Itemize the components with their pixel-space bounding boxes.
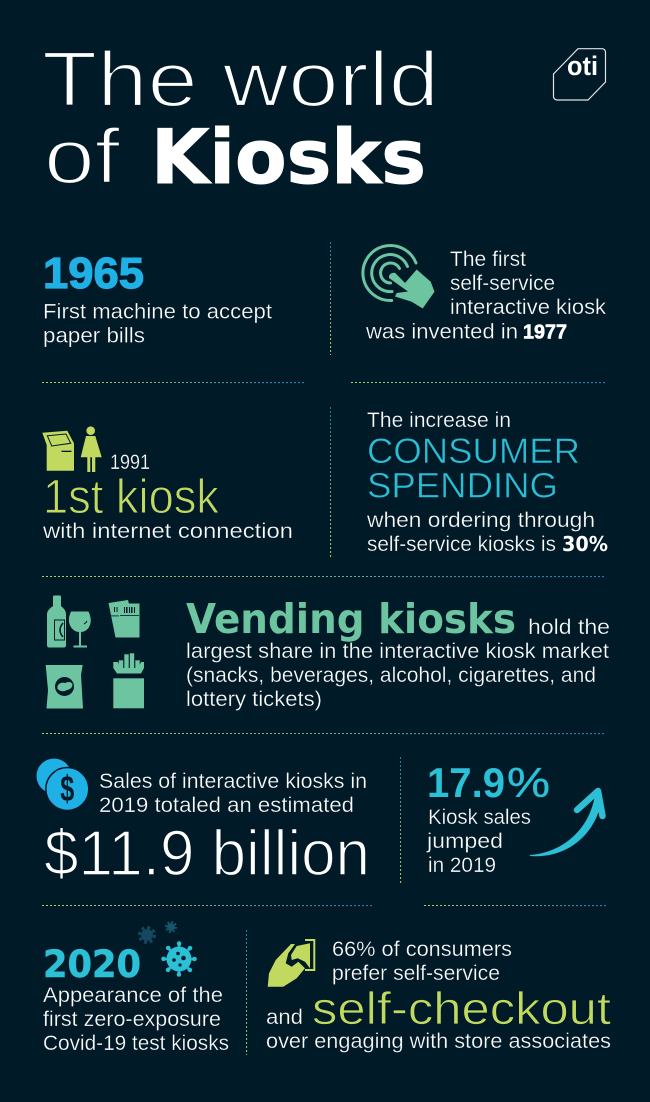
text: first kiosk 1977: self-service (450, 271, 555, 295)
icon: virus (140, 922, 194, 974)
panel: 17.9 percent: 17.9 (427, 759, 505, 806)
logo: oti (554, 49, 606, 100)
panel: first self-service kiosk (363, 246, 606, 344)
icon: bottle and wine glass (47, 596, 91, 648)
panel: self-checkout: 66% of consumers (332, 937, 512, 961)
panel: 1991 first internet kiosk: 1991 (110, 450, 150, 474)
panel: consumer spending (366, 408, 608, 556)
text: vending kiosks: hold the (528, 615, 610, 639)
panel: 1965 first machine: 1965 (43, 249, 144, 298)
panel: 1991 first internet kiosk: with internet connection (42, 519, 293, 543)
panel: 1965 first machine (43, 249, 272, 348)
text: vending kiosks (186, 595, 610, 711)
panel: 2020 covid kiosks: Appearance of the (43, 983, 223, 1007)
icon: cigarette pack (113, 653, 144, 708)
panel: 17.9 percent (426, 759, 602, 877)
panel: consumer spending: self-service kiosks is (367, 532, 556, 556)
panel: consumer spending: The increase in (367, 408, 511, 432)
text: first kiosk 1977 (365, 247, 606, 344)
panel: self-checkout (266, 937, 612, 1053)
panel: 1991 first internet kiosk: 1st kiosk (43, 471, 220, 524)
text: vending kiosks: (snacks, beverages, alcohol, cigarettes, and (186, 663, 596, 687)
text: vending kiosks: largest share in the interactive kiosk market (186, 639, 609, 663)
title: Kiosks (151, 113, 426, 201)
panel: 1965 first machine: paper bills (43, 324, 145, 348)
text: first kiosk 1977: 1977 (523, 322, 567, 344)
title (42, 35, 439, 201)
panel: consumer spending: CONSUMER (367, 432, 580, 471)
panel: consumer spending: SPENDING (367, 466, 558, 506)
panel: 2020 covid kiosks: first zero-exposure (43, 1007, 221, 1031)
title: The world (42, 35, 439, 123)
panel: 1991 first internet kiosk (42, 426, 293, 543)
panel: 1965 first machine: First machine to accept (43, 300, 272, 324)
text: vending kiosks: Vending kiosks (186, 595, 516, 643)
text: first kiosk 1977: was invented in (365, 320, 518, 344)
panel: 17.9 percent: in 2019 (428, 853, 496, 877)
panel: consumer spending: 30% (562, 532, 608, 556)
logo: oti: oti (567, 51, 598, 81)
icon: chips bag (46, 665, 83, 708)
icon: touch hand (363, 246, 434, 308)
text: first kiosk 1977: interactive kiosk (450, 295, 606, 319)
panel: self-checkout: self-checkout (312, 983, 612, 1034)
icon: lottery tickets (108, 600, 140, 638)
panel: 2020 covid kiosks: 2020 (43, 943, 141, 986)
icon: hand with card (268, 940, 314, 987)
text: first kiosk 1977: The first (450, 247, 526, 271)
panel: vending kiosks (46, 595, 610, 711)
panel: 17.9 percent: jumped (426, 829, 503, 853)
panel: consumer spending: when ordering through (366, 508, 595, 532)
icon: kiosk and person (42, 426, 102, 472)
panel: 17.9 percent: Kiosk sales (428, 805, 531, 829)
panel: self-checkout: and (266, 1005, 303, 1029)
title: of (44, 112, 120, 200)
arrow: growth (530, 791, 602, 856)
panel: 17.9 percent: % (507, 759, 550, 806)
icon: dollar coins: $ (60, 768, 74, 809)
panel: self-checkout: prefer self-service (332, 961, 500, 985)
icon: dollar coins (36, 758, 89, 810)
panel: sales total: Sales of interactive kiosks in (99, 769, 367, 793)
panel: sales total (36, 758, 370, 889)
panel: sales total: 2019 totaled an estimated (99, 793, 354, 817)
panel: sales total: $11.9 billion (44, 817, 370, 889)
panel: 2020 covid kiosks: Covid-19 test kiosks (43, 1031, 229, 1055)
text: vending kiosks: lottery tickets) (186, 687, 322, 711)
panel: 2020 covid kiosks (43, 922, 229, 1055)
panel: self-checkout: over engaging with store associates (266, 1029, 611, 1053)
